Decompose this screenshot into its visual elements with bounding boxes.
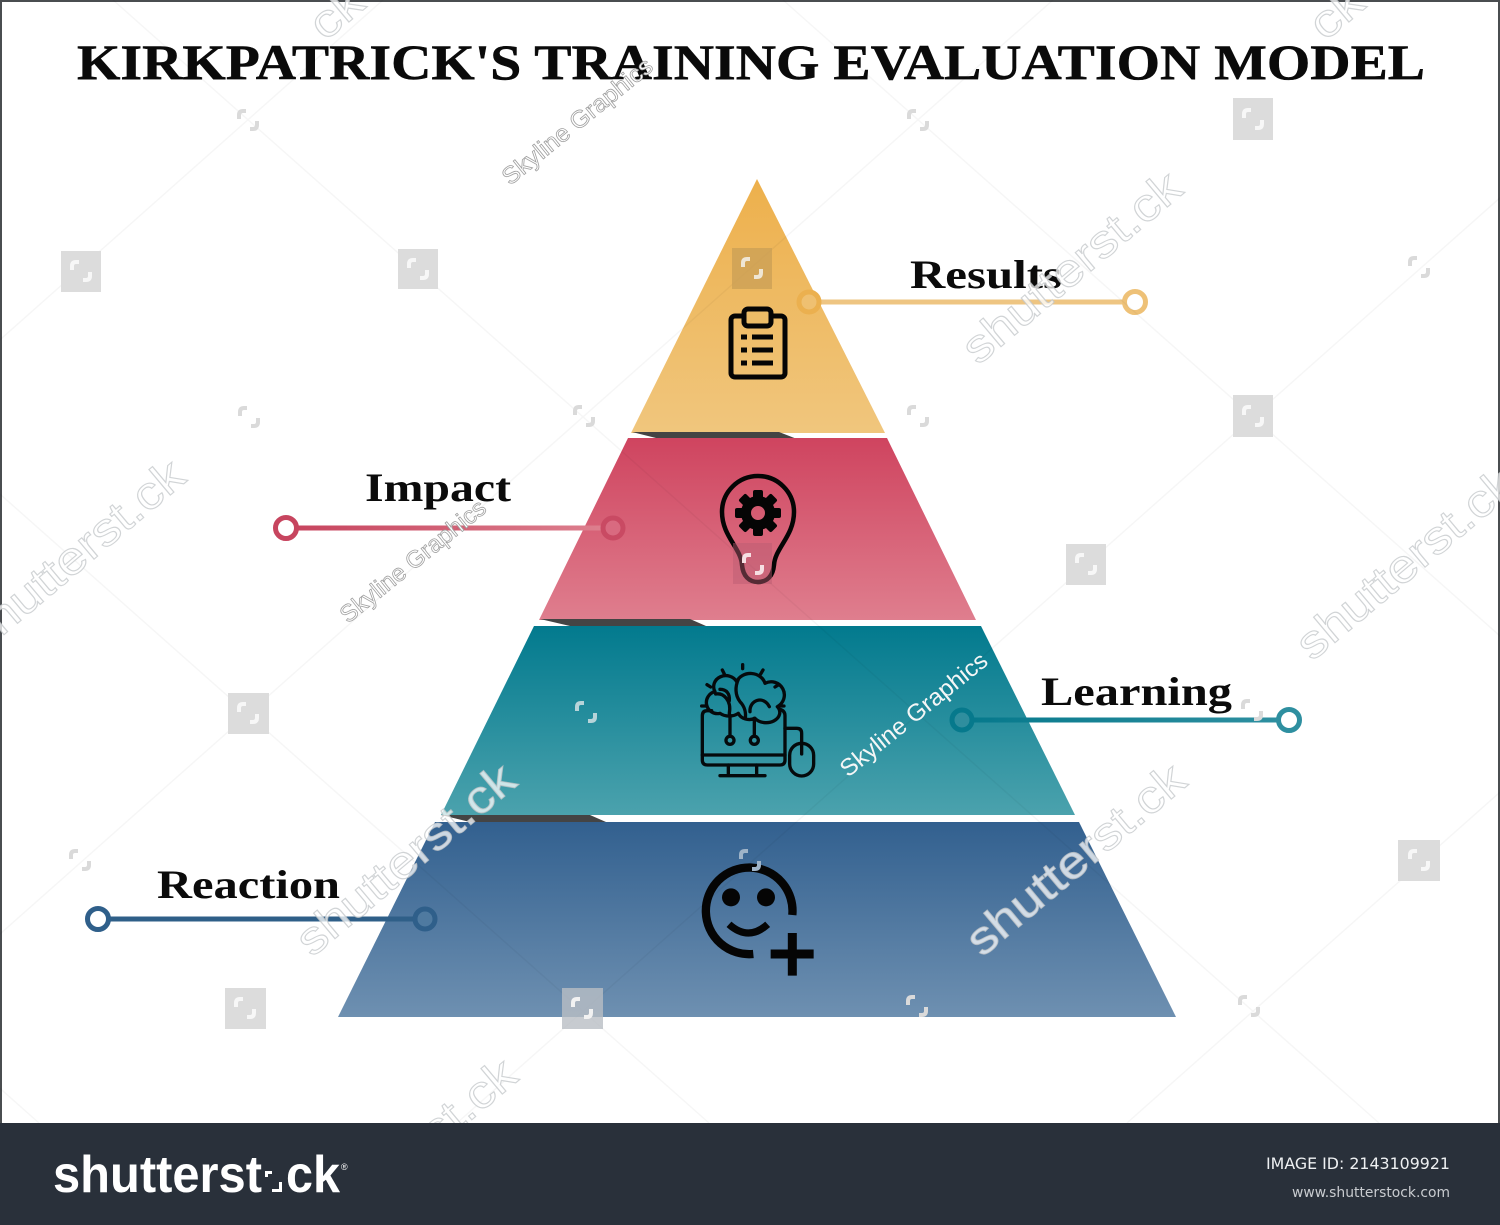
watermark text: Skyline Graphics: Skyline Graphics (835, 647, 993, 783)
watermark text: Skyline Graphics (335, 53, 993, 783)
label: impact: Impact (365, 465, 512, 510)
label: learning: Learning (1041, 669, 1232, 714)
tier shadow: learning (441, 815, 606, 822)
watermark text: shutterstock: shutterst.ck (285, 752, 526, 966)
watermark text: shutterstock: shutterst.ck (951, 160, 1192, 374)
icon: smiley with plus (706, 868, 814, 976)
watermark text: shutterstock: shutterst.ck (955, 752, 1196, 966)
footer logo: ck (286, 1146, 340, 1204)
label: learning (952, 669, 1300, 730)
tier shadow: impact (540, 619, 706, 626)
label: impact (276, 465, 623, 538)
icon: lightbulb with gear (722, 476, 794, 582)
image id: IMAGE ID: 2143109921 (1266, 1154, 1450, 1173)
watermark text: Skyline Graphics: Skyline Graphics (335, 494, 492, 629)
tier: learning (441, 626, 1075, 815)
watermark text: shutterstock: shutterst.ck (1285, 456, 1500, 670)
watermark marks (71, 111, 1428, 1015)
website: www.shutterstock.com (1292, 1185, 1450, 1201)
watermark tiles (61, 98, 1440, 1029)
tier: impact (539, 438, 976, 620)
icon: brain and computer (702, 665, 814, 776)
pyramid (338, 179, 1176, 1017)
icon: clipboard (731, 309, 785, 377)
label: results: Results (910, 252, 1062, 297)
footer bar (0, 1123, 1500, 1225)
footer logo: shutterst (53, 1146, 262, 1204)
tier: results (631, 179, 885, 433)
label: results (799, 252, 1146, 312)
watermark text: Skyline Graphics: Skyline Graphics (497, 53, 658, 191)
tier shadow: results (632, 432, 797, 439)
tier: reaction (338, 822, 1176, 1017)
label: reaction: Reaction (157, 862, 340, 907)
label: reaction (88, 862, 435, 930)
footer logo: ® (341, 1162, 348, 1172)
title: KIRKPATRICK'S TRAINING EVALUATION MODEL (77, 34, 1425, 90)
